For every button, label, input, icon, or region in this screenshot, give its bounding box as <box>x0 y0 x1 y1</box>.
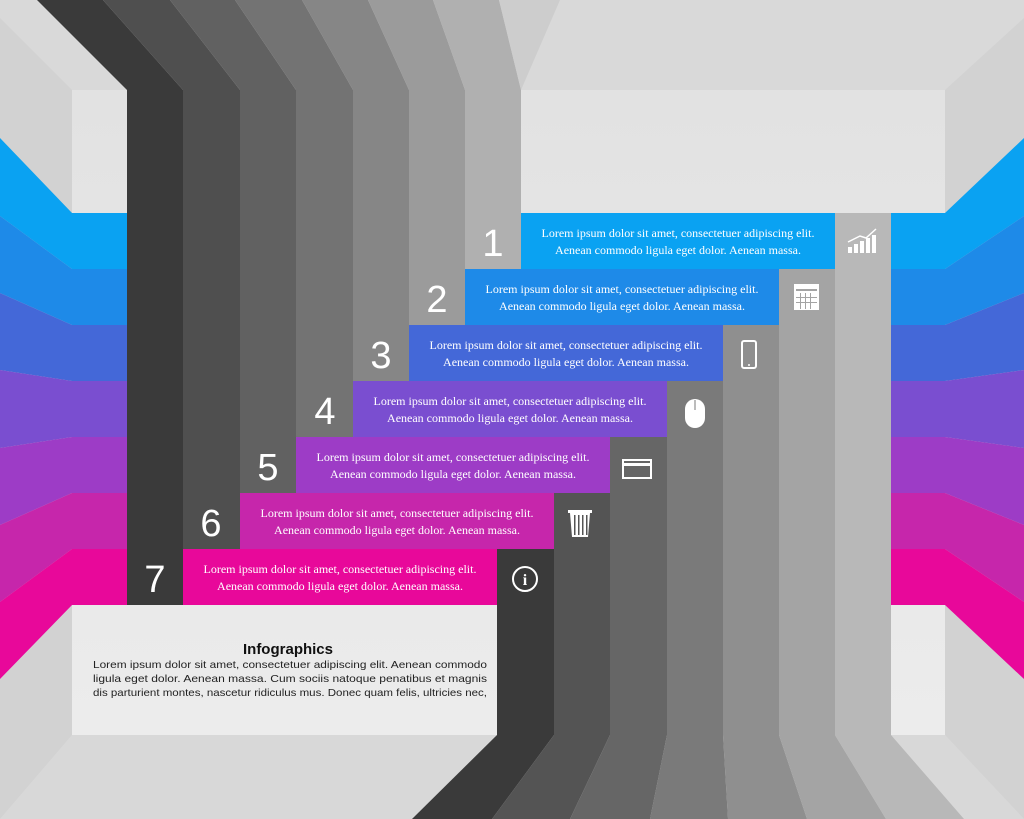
step 1: 1 <box>482 223 504 265</box>
step 6 <box>200 493 554 549</box>
step 7: 7 <box>144 559 166 601</box>
step 4 <box>314 381 667 437</box>
icon: info: i <box>523 572 528 589</box>
step 1 <box>482 213 835 269</box>
step 4: Aenean commodo ligula eget dolor. Aenean massa. <box>387 411 633 425</box>
left number columns <box>127 90 521 605</box>
step 5: 5 <box>257 447 279 489</box>
step 1: Lorem ipsum dolor sit amet, consectetuer adipiscing elit. <box>542 226 814 240</box>
wall color stripes <box>0 138 1024 679</box>
ceiling stripes <box>37 0 560 90</box>
title: Infographics: Infographics <box>243 641 333 658</box>
floor stripes <box>412 735 964 819</box>
step 6: Lorem ipsum dolor sit amet, consectetuer adipiscing elit. <box>261 506 533 520</box>
step 3 <box>370 325 723 381</box>
icon: mouse <box>685 399 705 428</box>
step 4: 4 <box>314 391 336 433</box>
text block: description: ligula eget dolor. Aenean massa. Cum sociis natoque penatibus et magnis <box>93 674 487 685</box>
text block: description: dis parturient montes, nascetur ridiculus mus. Donec quam felis, ultricies nec, <box>93 688 487 699</box>
step 3: 3 <box>370 335 392 377</box>
step 5: Aenean commodo ligula eget dolor. Aenean massa. <box>330 467 576 481</box>
text block: description: Lorem ipsum dolor sit amet, consectetuer adipiscing elit. Aenean commodo <box>93 660 487 671</box>
step 2 <box>426 269 779 325</box>
icon: card <box>623 460 651 478</box>
step 5: Lorem ipsum dolor sit amet, consectetuer adipiscing elit. <box>317 450 589 464</box>
icon: phone <box>742 341 756 368</box>
text block: description <box>93 660 487 699</box>
icon: chart <box>848 229 876 253</box>
icon: calculator <box>794 284 819 310</box>
step 1: Aenean commodo ligula eget dolor. Aenean massa. <box>555 243 801 257</box>
right icon columns <box>497 213 891 735</box>
step 3: Lorem ipsum dolor sit amet, consectetuer adipiscing elit. <box>430 338 702 352</box>
step 4: Lorem ipsum dolor sit amet, consectetuer adipiscing elit. <box>374 394 646 408</box>
icon: trash <box>568 510 592 537</box>
step 3: Aenean commodo ligula eget dolor. Aenean massa. <box>443 355 689 369</box>
step 5 <box>257 437 610 493</box>
step 7 <box>144 549 497 605</box>
step 6: Aenean commodo ligula eget dolor. Aenean massa. <box>274 523 520 537</box>
step 2: Aenean commodo ligula eget dolor. Aenean massa. <box>499 299 745 313</box>
step 7: Aenean commodo ligula eget dolor. Aenean massa. <box>217 579 463 593</box>
icon: info <box>513 567 537 591</box>
step 6: 6 <box>200 503 222 545</box>
step 2: Lorem ipsum dolor sit amet, consectetuer adipiscing elit. <box>486 282 758 296</box>
step 7: Lorem ipsum dolor sit amet, consectetuer adipiscing elit. <box>204 562 476 576</box>
step 2: 2 <box>426 279 448 321</box>
